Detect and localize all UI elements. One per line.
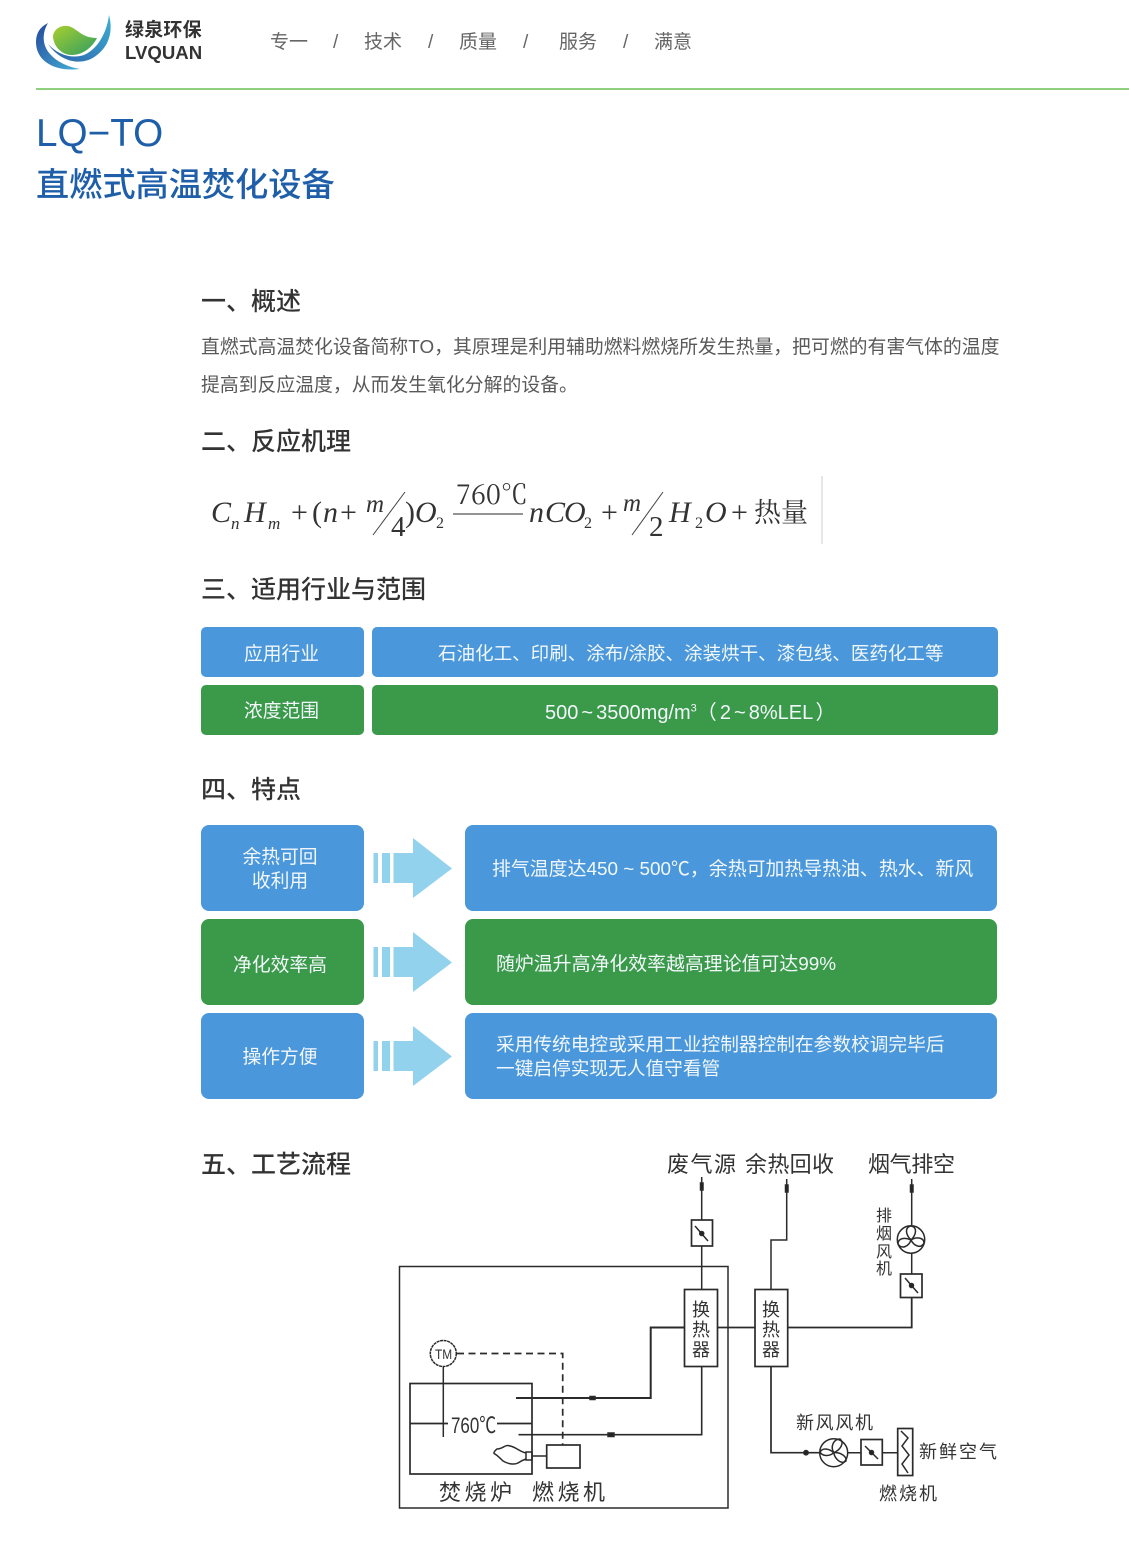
nav separator: / [623, 32, 628, 53]
reaction formula [211, 473, 822, 544]
reaction formula: n [231, 514, 240, 533]
heading: mechanism: 二、反应机理 [201, 428, 351, 456]
value: industries [372, 627, 998, 677]
reaction formula: + [291, 496, 308, 529]
reaction formula: 4 [391, 511, 406, 543]
reaction formula: H [243, 496, 268, 529]
reaction formula: ) [405, 496, 415, 529]
furnace labels: 燃烧机 [532, 1480, 605, 1505]
label: concentration [201, 685, 364, 735]
exhaust fan label: 排 [876, 1207, 892, 1225]
reaction formula: O [705, 496, 727, 529]
reaction formula: 2 [649, 511, 664, 543]
reaction formula: 热量 [754, 498, 808, 528]
reaction formula: 2 [436, 515, 444, 532]
value: concentration: 500 ~ 3500mg/m3（ 2 ~ 8%LEL ） [545, 702, 836, 724]
reaction formula: O [415, 496, 437, 529]
fresh air labels: 新鲜空气 [919, 1442, 997, 1462]
logo latin name: LVQUAN [125, 42, 202, 63]
title: product name: 直燃式高温焚化设备 [36, 167, 335, 204]
reaction formula: + [340, 496, 357, 529]
value: industries: 石油化工、印刷、涂布/涂胶、涂装烘干、漆包线、医药化工等 [438, 643, 944, 664]
heat exchanger 1: 器 [692, 1340, 710, 1360]
waste gas inlet with damper [692, 1177, 712, 1290]
air filter [898, 1428, 913, 1476]
exhaust fan label: 烟 [876, 1225, 892, 1243]
feature 2 label [201, 919, 364, 1005]
heading: process flow: 五、工艺流程 [201, 1151, 351, 1179]
arrow 1 [374, 838, 452, 898]
exhaust fan [897, 1179, 925, 1274]
reaction formula: H [668, 496, 693, 529]
exhaust fan label: 机 [876, 1260, 892, 1278]
thermometer: TM [435, 1346, 452, 1362]
nav separator: / [333, 32, 338, 53]
reaction formula: 2 [584, 515, 592, 532]
top labels: 余热回收 [745, 1152, 834, 1177]
logo [36, 15, 202, 70]
exhaust damper [900, 1274, 922, 1298]
heat exchanger 2: 热 [762, 1320, 780, 1340]
heat exchanger 2 [755, 1290, 788, 1366]
heat exchanger 1: 换 [692, 1300, 710, 1320]
label: industries: 应用行业 [244, 643, 319, 664]
furnace [410, 1384, 532, 1474]
reaction formula: C [211, 496, 232, 529]
heat exchanger 1: 热 [692, 1320, 710, 1340]
fresh air labels: 新风风机 [796, 1413, 873, 1433]
fresh air damper [861, 1440, 882, 1465]
feature 1 label: 余热可回 [242, 846, 318, 867]
thermometer [430, 1340, 456, 1437]
system boundary [400, 1266, 728, 1508]
heat exchanger 1 [684, 1290, 718, 1366]
feature 3 label [201, 1013, 364, 1099]
feature 1 description: 排气温度达450 ~ 500℃，余热可加热导热油、热水、新风 [492, 859, 973, 880]
feature 2 description [465, 919, 997, 1005]
top labels [667, 1152, 955, 1177]
reaction formula: C [545, 496, 566, 529]
nav: 满意: 满意 [654, 32, 692, 53]
fresh air line [771, 1366, 898, 1455]
reaction formula: n [323, 496, 338, 529]
reaction formula: m [366, 491, 384, 518]
heat recovery pipe [771, 1179, 788, 1290]
nav: 技术: 技术 [364, 32, 402, 53]
furnace temperature: 760℃ [451, 1414, 496, 1439]
reaction formula: n [529, 496, 544, 529]
top labels: 废气源 [667, 1152, 736, 1177]
reaction formula: + [601, 496, 618, 529]
reaction formula: 2 [695, 515, 703, 532]
link between exchangers [718, 1326, 755, 1328]
control signal [457, 1354, 563, 1445]
heading: features: 四、特点 [201, 776, 301, 804]
reaction formula: m [623, 490, 641, 517]
heat exchanger 2: 器 [762, 1340, 780, 1360]
reaction formula: ( [312, 496, 322, 529]
label: industries [201, 627, 364, 677]
exhaust pipe [788, 1298, 912, 1328]
title: model: LQ−TO [36, 112, 163, 155]
feature 3 description: 采用传统电控或采用工业控制器控制在参数校调完毕后 [496, 1034, 944, 1055]
feature 1 description [465, 825, 997, 911]
arrow 2 [374, 932, 452, 992]
feature 2 description: 随炉温升高净化效率越高理论值可达99% [496, 954, 836, 974]
feature 3 description [465, 1013, 997, 1099]
label: concentration: 浓度范围 [244, 700, 319, 721]
heat exchanger 2: 换 [762, 1300, 780, 1320]
fresh air fan [820, 1439, 848, 1467]
nav: 服务: 服务 [559, 32, 597, 53]
logo name: 绿泉环保 [125, 20, 202, 41]
heading: industries and range: 三、适用行业与范围 [201, 576, 426, 604]
internal pipes [410, 1328, 702, 1436]
top labels: 烟气排空 [868, 1152, 955, 1177]
exhaust fan label [876, 1207, 892, 1278]
feature 2 label: 净化效率高 [233, 954, 327, 974]
nav separator: / [428, 32, 433, 53]
burner [494, 1445, 580, 1468]
reaction formula: + [731, 496, 748, 529]
overview text line 1: 直燃式高温焚化设备简称TO，其原理是利用辅助燃料燃烧所发生热量，把可燃的有害气体的温度 [201, 336, 999, 357]
feature 1 label [201, 825, 364, 911]
arrow 3 [374, 1026, 452, 1086]
fresh air labels [796, 1413, 997, 1504]
furnace labels: 焚烧炉 [439, 1480, 512, 1505]
feature 1 label: 收利用 [252, 870, 308, 891]
reaction formula: m [268, 514, 280, 533]
heading: overview: 一、概述 [201, 288, 301, 316]
reaction formula: O [564, 496, 586, 529]
feature 3 description: 一键启停实现无人值守看管 [496, 1058, 720, 1079]
nav: 质量: 质量 [459, 32, 497, 53]
overview text line 2: 提高到反应温度，从而发生氧化分解的设备。 [201, 374, 578, 395]
furnace labels [439, 1480, 605, 1505]
fresh air labels: 燃烧机 [879, 1484, 937, 1504]
exhaust fan label: 风 [876, 1244, 892, 1261]
value: concentration [372, 685, 998, 735]
feature 3 label: 操作方便 [242, 1046, 318, 1067]
nav: 专一: 专一 [270, 32, 308, 53]
reaction formula: 760℃ [456, 473, 528, 512]
nav separator: / [523, 32, 528, 53]
